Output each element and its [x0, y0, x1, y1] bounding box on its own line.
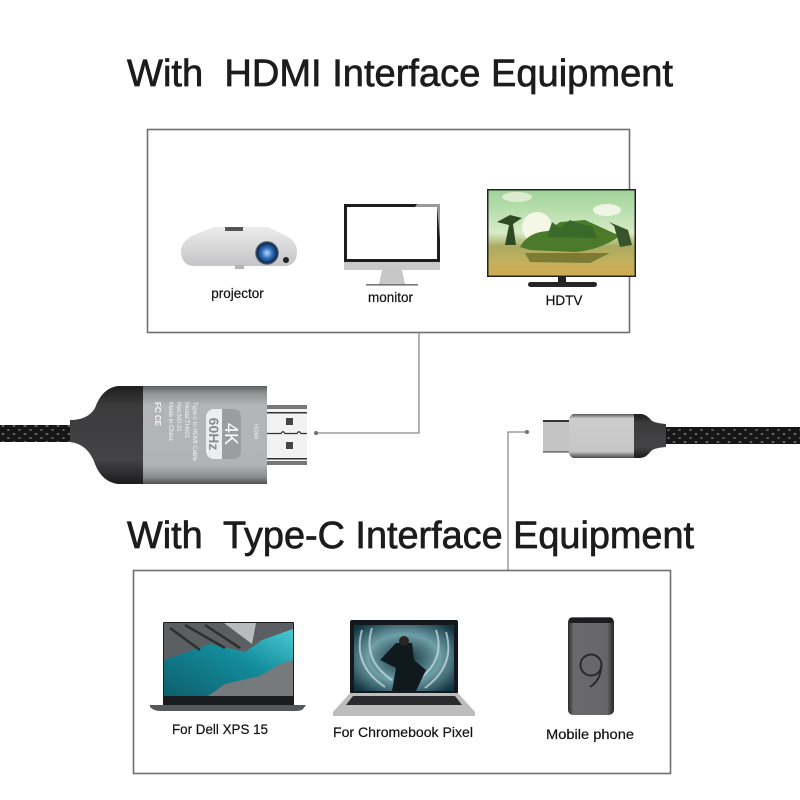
label: Dell XPS 15: For Dell XPS 15: [172, 721, 268, 737]
product details: Type-c to HDMI Cable: [191, 402, 197, 462]
icon: monitor: [344, 204, 440, 286]
panel: Type-C equipment: [134, 570, 670, 774]
label: Chromebook Pixel: For Chromebook Pixel: [333, 724, 473, 740]
product details: Model:TH001: [183, 402, 189, 439]
braided cable left: [0, 425, 72, 442]
icon: HDTV: [487, 189, 636, 287]
HDMI plug tip: [267, 405, 307, 465]
label: HDTV: HDTV: [546, 293, 582, 308]
4K 60Hz badge: 60Hz: [206, 418, 222, 450]
HDMI connector: [0, 386, 307, 484]
label: mobile phone: Mobile phone: [546, 726, 634, 742]
aluminium shell: [143, 386, 267, 484]
product details: Made in China: [167, 402, 173, 441]
connector line: HDMI plug to panel: [314, 332, 419, 435]
icon: Chromebook Pixel laptop: [333, 620, 475, 716]
label: monitor: monitor: [368, 290, 414, 305]
overmold: [632, 414, 666, 458]
HDMI label: HDMI: [252, 424, 258, 440]
title: Type-C equipment: With Type-C Interface Equipment: [127, 515, 694, 557]
product details: FC CE: [153, 402, 162, 427]
label: projector: projector: [211, 286, 264, 301]
black overmold: [70, 386, 145, 484]
4K 60Hz badge: [206, 409, 241, 459]
aluminium shell: [569, 414, 634, 458]
icon: Dell XPS 15 laptop: [150, 622, 306, 711]
Type-C connector: [543, 414, 800, 458]
Type-C plug tip: [543, 420, 571, 453]
panel: HDMI equipment: [148, 130, 636, 332]
icon: mobile phone: [568, 617, 614, 715]
connector line: Type-C plug to panel: [508, 430, 529, 570]
icon: projector: [181, 227, 297, 269]
4K 60Hz badge: 4K: [221, 423, 241, 445]
product details: [153, 402, 197, 462]
braided cable right: [664, 427, 800, 444]
title: HDMI equipment: With HDMI Interface Equipment: [127, 53, 673, 95]
product details: Rev:NO.01: [175, 402, 181, 432]
